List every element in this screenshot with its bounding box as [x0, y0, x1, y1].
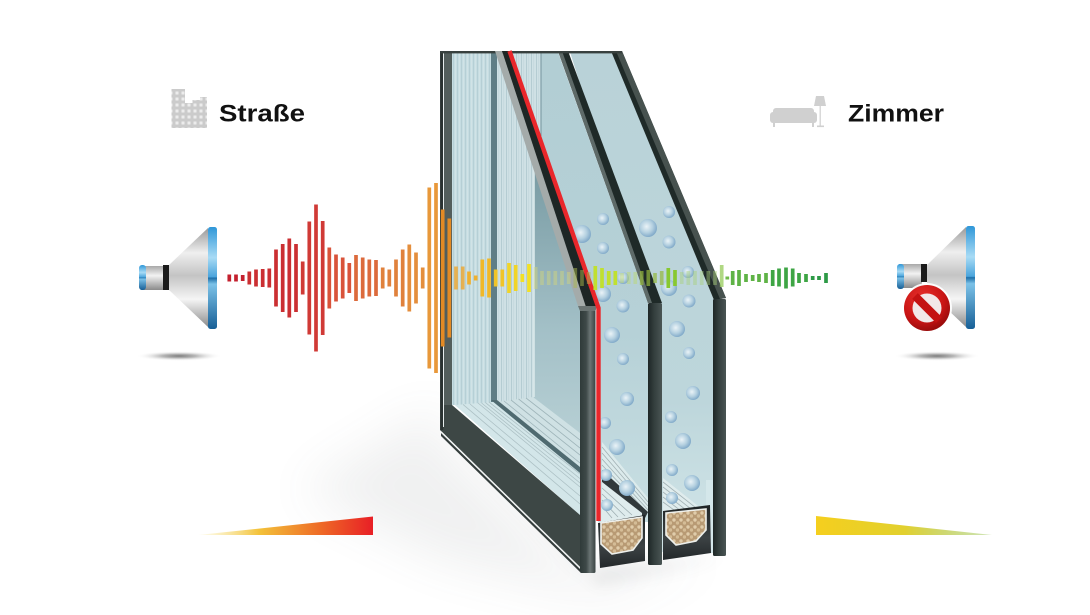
right level wedge: inside noise [816, 516, 992, 535]
left level wedge: outside noise [198, 516, 373, 535]
red membrane [510, 51, 598, 521]
middle pane sill [601, 442, 648, 523]
icon: sofa and lamp [770, 96, 826, 127]
front frame [440, 51, 622, 573]
bubbles [573, 206, 700, 511]
rear pane sill [663, 478, 713, 553]
left speaker [136, 227, 222, 361]
white seal line [441, 432, 580, 568]
right speaker with prohibition sign [894, 226, 980, 361]
label: Zimmer: Zimmer [848, 100, 944, 128]
middle frame [558, 51, 662, 565]
triple-glazed window cross-section [440, 51, 726, 573]
label: Straße: Straße [219, 100, 305, 128]
sound wave: loud to quiet [229, 183, 826, 373]
window sill bands [497, 397, 580, 470]
infographic canvas [139, 50, 992, 590]
floor shadow under window [300, 405, 726, 600]
rear spacer [663, 505, 711, 560]
rear pane [566, 52, 714, 552]
heading: Zimmer with sofa icon [770, 96, 944, 128]
icon: prohibition sign [902, 283, 952, 333]
icon: buildings [172, 89, 207, 128]
front pane and stepped glass [452, 52, 580, 515]
heading: Straße with building icon [172, 89, 305, 128]
middle spacer [598, 515, 645, 568]
rear frame [611, 51, 726, 556]
middle pane [508, 52, 648, 522]
